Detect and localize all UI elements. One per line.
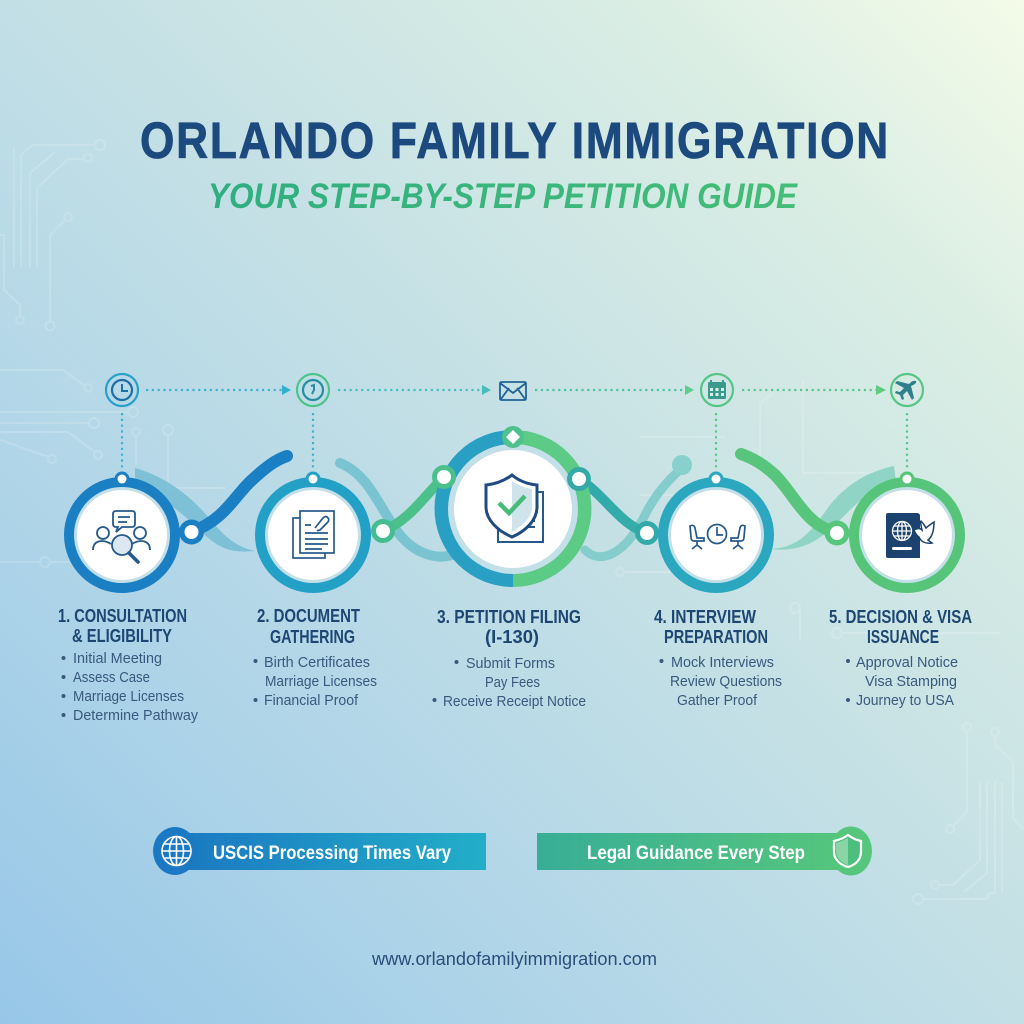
text block: step 4: Mock Interviews (671, 654, 774, 671)
text block: step 1: & ELIGIBILITY (72, 626, 172, 646)
text block: step 4: PREPARATION (664, 627, 768, 647)
text block: step 5 (829, 607, 972, 709)
subtitle: YOUR STEP-BY-STEP PETITION GUIDE (208, 177, 798, 216)
text block: step 4: Gather Proof (677, 692, 758, 709)
text block: step 1: Marriage Licenses (73, 688, 184, 705)
text block: step 1 (58, 606, 198, 724)
icon: calendar timeline marker (701, 374, 733, 406)
callout: USCIS processing times (153, 827, 486, 875)
title: ORLANDO FAMILY IMMIGRATION (140, 112, 890, 169)
step 3: petition filing ring (442, 426, 585, 580)
step 1: consultation ring (64, 472, 180, 593)
icon: airplane timeline marker (891, 374, 923, 406)
callout: legal guidance: Legal Guidance Every Step (587, 842, 805, 864)
text block: step 3: Pay Fees (485, 674, 540, 691)
step 2: document ring (255, 472, 371, 593)
step 4: interview ring (658, 472, 774, 593)
timeline connector: dotted lines (122, 385, 907, 468)
icon: shield with check and document (486, 475, 543, 542)
text block: step 4: 4. INTERVIEW (654, 607, 756, 627)
ribbon: faded background waves (135, 455, 896, 557)
icon: people with magnifier (93, 511, 150, 562)
icon: chairs and clock (690, 524, 745, 549)
text block: step 2: GATHERING (270, 627, 355, 647)
text block: step 2: Financial Proof (264, 692, 359, 709)
icon: documents with paperclip (293, 511, 334, 558)
text block: step 1: 1. CONSULTATION (58, 606, 187, 626)
text block: step 5: Journey to USA (856, 692, 954, 709)
icon: globe (162, 836, 191, 866)
icon: clock timeline marker (106, 374, 138, 406)
text block: step 2 (254, 606, 377, 709)
icon: envelope timeline marker (500, 382, 526, 400)
callout: USCIS processing times: USCIS Processing Times Vary (213, 842, 451, 864)
connector nodes (179, 465, 850, 546)
text block: step 3 (432, 607, 586, 710)
text block: step 2: Birth Certificates (264, 654, 370, 671)
text block: step 1: Assess Case (73, 669, 150, 686)
text block: step 5: Visa Stamping (865, 673, 957, 690)
text block: step 3: (I-130) (485, 627, 539, 647)
icon: passport with dove (886, 513, 934, 558)
text block: step 3: Submit Forms (466, 655, 555, 672)
text block: step 5: ISSUANCE (867, 627, 939, 647)
text block: step 3: Receive Receipt Notice (443, 693, 586, 710)
step 5: decision ring (849, 472, 965, 593)
footer website: www.orlandofamilyimmigration.com (371, 949, 657, 969)
icon: timer timeline marker (297, 374, 329, 406)
text block: step 4: Review Questions (670, 673, 782, 690)
text block: step 5: 5. DECISION & VISA (829, 607, 972, 627)
text block: step 1: Determine Pathway (73, 707, 198, 724)
text block: step 2: Marriage Licenses (265, 673, 377, 690)
text block: step 1: Initial Meeting (73, 650, 162, 667)
callout: legal guidance (537, 826, 872, 876)
text block: step 3: 3. PETITION FILING (437, 607, 581, 627)
connector curves (191, 454, 837, 533)
icon: shield (834, 835, 861, 867)
text block: step 4 (654, 607, 782, 709)
text block: step 2: 2. DOCUMENT (257, 606, 360, 626)
text block: step 5: Approval Notice (856, 654, 958, 671)
